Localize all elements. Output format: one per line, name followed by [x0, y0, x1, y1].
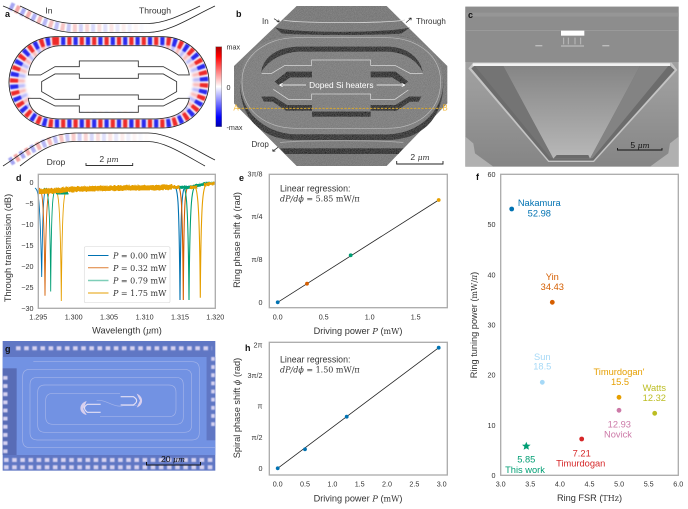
tick labels: 5.0 [614, 480, 624, 488]
scale bar [146, 454, 200, 465]
point: Sun: Sun [534, 352, 551, 362]
crescent shadow [261, 47, 423, 72]
port arrows [274, 19, 279, 22]
ring shadow [240, 35, 443, 140]
tick labels: 40 [488, 270, 496, 279]
panel g: optical micrograph of spiral [3, 341, 216, 471]
tick labels: 0 [258, 464, 262, 473]
tick labels: 10 [488, 421, 496, 430]
tick labels: 1.320 [206, 312, 224, 322]
panel a: ring resonator field simulation [3, 6, 215, 167]
legend: P = 0.79 mW [112, 276, 167, 286]
tick labels: π [258, 402, 263, 410]
point: Nakamura: 52.98 [528, 209, 551, 219]
panel b: SEM of ring: b [236, 9, 242, 19]
labels: a [5, 9, 11, 19]
point: Novick: Novick [604, 430, 632, 440]
panel h: spiral phase shift: Spiral phase shift ϕ (rad) [232, 358, 242, 458]
tick labels [488, 170, 683, 488]
data points [276, 198, 441, 304]
tick labels: 2.0 [382, 480, 392, 488]
colorbar: 0 [226, 83, 230, 92]
panel d: transmission spectra [3, 173, 224, 336]
noisy baseline [38, 183, 215, 192]
point: Novick: 12.93 [608, 420, 631, 430]
tick labels: 3.0 [437, 480, 447, 488]
tick labels [21, 178, 224, 322]
tick labels: 4.5 [584, 480, 594, 488]
colorbar: max [226, 42, 240, 52]
tick labels: 1.0 [365, 312, 375, 322]
tick labels: −25 [21, 283, 34, 292]
panel a: ring resonator field simulation: Drop [47, 157, 66, 167]
panel h: spiral phase shift: Driving power P (mW) [314, 494, 402, 504]
heater outlines [28, 46, 189, 119]
point: Yin [541, 272, 564, 305]
panel d: transmission spectra: d [16, 173, 22, 183]
point: Yin: Yin [546, 272, 559, 282]
scale bar [86, 154, 133, 166]
A–B dashed line [238, 107, 443, 110]
tick labels: −30 [21, 304, 34, 313]
regression note: dP/dϕ = 5.85 mW/π [280, 194, 360, 204]
tick labels: 3.0 [496, 480, 506, 488]
point: Watts [643, 383, 666, 416]
spiral waveguide [23, 362, 215, 448]
panel b: SEM of ring: B [442, 104, 448, 113]
lower arm shadow [261, 97, 421, 117]
tick labels: 4.0 [555, 480, 565, 488]
tick labels: 1.295 [29, 312, 47, 322]
legend: P = 0.32 mW [112, 264, 167, 273]
panel a: ring resonator field simulation: In [45, 6, 53, 16]
tick labels: 5.5 [644, 480, 654, 488]
panel g: optical micrograph of spiral: g [5, 344, 10, 354]
panel b: SEM of ring [233, 6, 448, 166]
tick labels: 1.5 [355, 480, 365, 488]
point: This work star: 5.85 [517, 455, 535, 465]
scale bar: 2 μm [410, 152, 430, 162]
panel d: transmission spectra: Through transmission (dB) [3, 194, 13, 302]
legend: P = 1.75 mW [112, 289, 167, 298]
bond pads [4, 348, 216, 467]
panel h: spiral phase shift [232, 340, 447, 504]
tick labels: 0.0 [273, 480, 283, 488]
tick labels: 2π [254, 340, 263, 350]
scale bar [397, 152, 443, 164]
panel e: ring phase shift: Driving power P (mW) [314, 326, 402, 336]
point: Nakamura [509, 198, 562, 219]
regression note: Linear regression: [280, 354, 350, 364]
tick labels: 1.310 [136, 312, 154, 322]
tick labels: −10 [21, 220, 34, 229]
regression note [280, 354, 360, 374]
regression note: dP/dϕ = 1.50 mW/π [280, 366, 360, 374]
panel e: ring phase shift: Ring phase shift ϕ (rad) [232, 192, 242, 288]
panel f: tuning power vs FSR [469, 170, 683, 503]
point: Timurdogan': 15.5 [611, 377, 629, 387]
tick labels: π/4 [252, 212, 262, 221]
tick labels: 60 [488, 170, 496, 179]
panel b: SEM of ring: Through [416, 17, 446, 26]
tick labels [248, 340, 447, 488]
panel f: tuning power vs FSR: Ring tuning power (mW/π) [469, 272, 479, 378]
colorbar: -max [226, 123, 243, 132]
panel e: ring phase shift: e [239, 173, 244, 183]
tick labels: 0 [492, 471, 496, 480]
panel e: ring phase shift [232, 170, 447, 336]
tick labels: 6.0 [673, 480, 683, 488]
traces [35, 183, 208, 301]
top bus waveguide field [10, 6, 150, 162]
tick labels: 1.5 [411, 312, 421, 322]
tick labels: 2.5 [409, 480, 419, 488]
point: Timurdogan': Timurdogan' [593, 367, 645, 377]
point: Yin: 34.43 [541, 282, 564, 292]
scale bar: 2 μm [99, 154, 119, 164]
device top view marks [561, 31, 584, 36]
panel a: ring resonator field simulation: Through [139, 6, 171, 16]
colorbar [216, 42, 243, 132]
waveguide highlights [242, 20, 441, 143]
panel h: spiral phase shift: h [245, 343, 250, 353]
regression note: Linear regression: [280, 184, 350, 194]
regression note [280, 184, 360, 204]
tick labels: 1.315 [171, 312, 189, 322]
point: Sun: 18.5 [533, 362, 551, 372]
tick labels: −5 [25, 199, 34, 208]
tick labels: 1.300 [65, 312, 83, 322]
scale bar [618, 140, 662, 150]
tick labels: 0.5 [300, 480, 310, 488]
tick labels [248, 170, 421, 322]
point: Sun [533, 352, 551, 385]
point: Watts: 12.32 [643, 393, 666, 403]
point: This work star [505, 442, 545, 475]
legend [84, 247, 170, 303]
panel b: SEM of ring: A [233, 104, 239, 113]
tick labels: 1.305 [100, 312, 118, 322]
tick labels: 50 [488, 220, 496, 229]
point: Watts: Watts [643, 383, 666, 393]
heater label: Doped Si heaters [309, 80, 374, 90]
point: Nakamura: Nakamura [518, 198, 562, 208]
point: This work star: This work [505, 465, 545, 475]
panel b: SEM of ring: Drop [252, 140, 269, 149]
tick labels: π/8 [252, 255, 262, 264]
tick labels: π/2 [252, 433, 262, 442]
point: Timurdogan: Timurdogan [556, 459, 605, 469]
central couplers [80, 394, 142, 415]
tick labels: 1.0 [327, 480, 337, 488]
tick labels: −20 [21, 262, 34, 271]
tick labels: 3π/2 [248, 371, 263, 380]
panel f: tuning power vs FSR: Ring FSR (THz) [557, 493, 622, 503]
point: Timurdogan' [593, 367, 645, 400]
tick labels: 0 [30, 178, 34, 187]
point: Timurdogan: 7.21 [573, 449, 591, 459]
tick labels: 0.0 [273, 312, 283, 322]
bus shadows [275, 27, 410, 35]
tick labels: 30 [488, 320, 496, 330]
axes frame [38, 174, 215, 308]
data points [276, 346, 441, 470]
panel b: SEM of ring: In [262, 17, 269, 26]
tick labels: −15 [21, 241, 34, 250]
tick labels: 0 [258, 298, 262, 307]
panel c: SEM cross-section [465, 7, 679, 167]
tick labels: 0.5 [319, 312, 329, 322]
upper arm shadows [275, 72, 312, 85]
point: Timurdogan [556, 437, 605, 469]
scale bar: 20 μm [161, 454, 185, 464]
ring field [14, 41, 204, 124]
ring outline [9, 37, 209, 128]
legend: P = 0.00 mW [112, 252, 167, 260]
panel f: tuning power vs FSR: f [476, 172, 480, 182]
point: Novick [604, 408, 632, 440]
panel d: transmission spectra: Wavelength (μm) [92, 326, 162, 336]
tick labels: 20 [488, 371, 496, 380]
tick labels: 3.5 [525, 480, 535, 488]
panel c: SEM cross-section: c [468, 10, 473, 20]
scale bar: 5 μm [630, 140, 650, 150]
tick labels: 3π/8 [248, 170, 263, 178]
